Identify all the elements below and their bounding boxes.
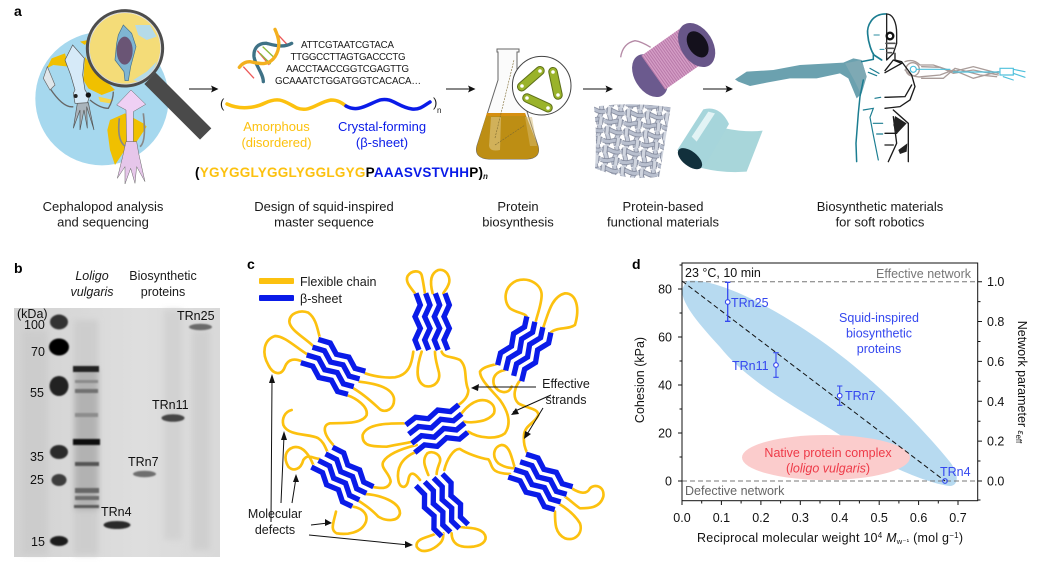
amorphous chain [227, 100, 346, 109]
caption: soft robotics: for soft robotics [836, 214, 925, 230]
label: amorphous: Amorphous [243, 119, 310, 134]
bottom axis labels: 0.7 [949, 511, 967, 525]
y axis title left: Cohesion (kPa) [633, 337, 647, 423]
panel d: cohesion chart [632, 256, 1029, 546]
crystal-forming chain [346, 99, 430, 109]
icon: bionic human figure [735, 14, 1025, 162]
DNA sequence text: AACCTAACCGGTCGAGTTG [286, 64, 409, 75]
arrow 1 [189, 86, 218, 92]
column header biosynthetic proteins: Biosynthetic [129, 269, 197, 283]
data labels: TRn7 [845, 389, 876, 403]
flexible chains [264, 270, 603, 551]
label: crystal-forming: Crystal-forming [338, 119, 426, 134]
ladder labels [17, 307, 48, 549]
band labels: TRn11 [152, 398, 189, 412]
icon: flask [476, 49, 571, 159]
biosynthetic ellipse [682, 281, 957, 486]
native protein label: ( [786, 462, 791, 476]
icon: woven mesh [594, 104, 671, 178]
caption: biosynthesis: biosynthesis [482, 214, 554, 230]
ladder labels: 35 [30, 450, 44, 464]
bottom axis labels: 0.0 [673, 511, 691, 525]
bottom axis labels: 0.5 [871, 511, 888, 525]
right axis labels: 0.0 [987, 474, 1004, 488]
icon: DNA helix [239, 29, 292, 82]
squid: pink [117, 90, 146, 184]
subscript n: n [483, 172, 488, 181]
bottom axis labels: 0.1 [713, 511, 730, 525]
bracket and chain schematic [220, 95, 441, 115]
squid-inspired label: Squid-inspired [839, 311, 919, 325]
left axis labels [658, 282, 672, 488]
torso: robotic side [885, 53, 915, 162]
reference dashed lines [682, 282, 978, 481]
x axis title: (mol g [909, 531, 949, 545]
caption: cephalopod: Cephalopod analysis [43, 199, 163, 214]
caption: functional materials: Protein-based [623, 199, 703, 214]
data points [725, 282, 947, 483]
caption: soft robotics: Biosynthetic materials [817, 199, 943, 214]
icon: fibre spool [621, 16, 723, 104]
x axis title: Reciprocal molecular weight 10 [697, 531, 878, 545]
panel label c: c [247, 256, 255, 272]
data labels [731, 296, 971, 479]
caption: design: Design of squid-inspired [254, 199, 394, 214]
x axis title: ) [959, 531, 963, 545]
column header Loligo vulgaris: vulgaris [70, 285, 114, 299]
magnifier lens [90, 13, 160, 84]
data labels: TRn25 [731, 296, 769, 310]
bottom axis labels [673, 511, 967, 525]
legend: Flexible chain [300, 275, 376, 289]
protein bands [104, 324, 212, 529]
column header biosynthetic proteins: proteins [141, 285, 185, 299]
label: effective strands: strands [546, 393, 586, 407]
right axis labels: 0.4 [987, 395, 1004, 409]
caption: functional materials: functional materials [607, 214, 719, 230]
data labels: TRn11 [732, 359, 769, 373]
x axis title: w⁻¹ [896, 537, 910, 546]
beta sheet clusters [300, 293, 573, 538]
master sequence: (YGYGGLYGGLYGGLGYGPAAASVSTVHHP) [195, 165, 483, 180]
arrow 3 [583, 86, 613, 92]
legend: β-sheet [300, 292, 342, 306]
ladder labels: (kDa) [17, 307, 48, 321]
network diagram [264, 270, 603, 551]
caption: biosynthesis: Protein [497, 199, 539, 214]
label: amorphous: (disordered) [241, 135, 312, 150]
left axis labels: 40 [658, 378, 672, 392]
ladder labels: 100 [24, 318, 45, 332]
trend line [682, 281, 945, 481]
arrow 4 [703, 86, 733, 92]
annotation arrows [271, 380, 551, 545]
panel label b: b [14, 260, 23, 276]
torso: biological side [856, 53, 873, 162]
bracket and chain schematic: n [437, 106, 441, 115]
ladder labels: 70 [31, 345, 45, 359]
axes [678, 263, 982, 505]
left axis labels: 20 [658, 426, 672, 440]
right axis labels: 1.0 [987, 275, 1004, 289]
arrow heads [269, 374, 531, 548]
bottom axis labels: 0.6 [910, 511, 927, 525]
label: molecular defects: Molecular [248, 507, 302, 521]
continents [47, 40, 147, 165]
native protein label: Native protein complex [764, 446, 892, 460]
right axis labels [987, 275, 1004, 488]
bracket and chain schematic: ) [433, 95, 437, 110]
effective network label: Effective network [876, 267, 972, 281]
legend [259, 275, 376, 306]
panel label d: d [632, 256, 641, 272]
panel label a: a [14, 3, 22, 19]
defective network label: Defective network [685, 484, 785, 498]
Loligo lane bands [73, 366, 100, 508]
band labels: TRn7 [128, 455, 159, 469]
left axis labels: 80 [658, 282, 672, 296]
x axis title: −1 [949, 531, 959, 540]
panel c: network schematic [247, 256, 603, 551]
icon: rolled film [674, 109, 763, 173]
ladder labels: 25 [30, 473, 44, 487]
squid: blue [43, 45, 113, 130]
squid gladius in lens [115, 25, 136, 81]
DNA sequence text: ATTCGTAATCGTACA [301, 40, 395, 51]
label: effective strands: Effective [542, 377, 590, 391]
icon: globe with squids and magnifier [35, 11, 206, 184]
ladder labels: 55 [30, 386, 44, 400]
y axis title right: eff [1014, 434, 1023, 444]
bottom axis labels: 0.2 [752, 511, 770, 525]
panel b: gel [14, 260, 220, 557]
right axis labels: 0.6 [987, 355, 1004, 369]
gel image [14, 308, 220, 557]
band labels [101, 309, 215, 519]
caption: design: master sequence [274, 214, 374, 230]
DNA sequence text: TTGGCCTTAGTGACCCTG [290, 52, 406, 63]
band labels: TRn4 [101, 505, 132, 519]
right axis labels: 0.2 [987, 434, 1004, 448]
data labels: TRn4 [940, 465, 971, 479]
ladder bands [49, 314, 69, 546]
right axis labels: 0.8 [987, 315, 1004, 329]
arrow 2 [446, 86, 476, 92]
squid-inspired label: biosynthetic [846, 326, 912, 340]
native protein ellipse [742, 435, 910, 480]
ladder labels: 15 [31, 535, 45, 549]
robotic arm [905, 61, 998, 78]
left axis labels: 0 [665, 474, 672, 488]
column header Loligo vulgaris: Loligo [75, 269, 109, 283]
caption: cephalopod: and sequencing [57, 214, 149, 230]
DNA sequence text: GCAAATCTGGATGGTCACACA… [275, 76, 421, 87]
bottom axis labels: 0.3 [792, 511, 809, 525]
zoom circle with protein links [512, 56, 571, 115]
magnifier handle [150, 78, 206, 134]
bracket and chain schematic: ( [220, 96, 225, 111]
bottom axis labels: 0.4 [831, 511, 848, 525]
DNA sequence text [275, 40, 421, 87]
head [868, 14, 887, 60]
band labels: TRn25 [177, 309, 215, 323]
x axis title: M [882, 531, 897, 545]
panel a: workflow [14, 3, 1025, 230]
left axis labels: 60 [658, 330, 672, 344]
squid-inspired label: proteins [857, 342, 901, 356]
native protein label: loligo vulgaris) [790, 462, 870, 476]
globe [35, 32, 169, 165]
label: molecular defects: defects [255, 523, 295, 537]
y axis title right: Network parameter ε [1015, 321, 1029, 434]
condition label: 23 °C, 10 min [685, 266, 761, 280]
label: crystal-forming: (β-sheet) [356, 135, 408, 150]
biological arm [735, 58, 867, 98]
x axis title: 4 [878, 531, 883, 540]
